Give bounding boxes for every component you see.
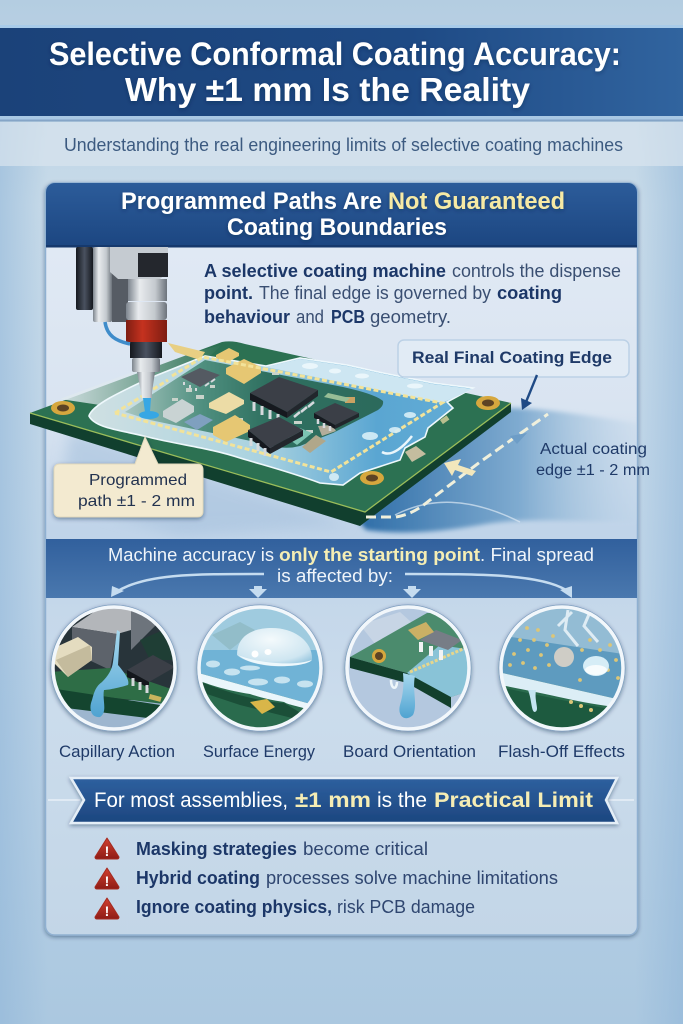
black chips <box>181 368 359 456</box>
arrow <box>526 375 537 402</box>
title text: Selective Conformal Coating Accuracy: <box>49 36 621 72</box>
programmed dashed path <box>115 357 442 472</box>
banner: practical limit: is the <box>377 789 427 812</box>
banner: practical limit: For most assemblies, <box>94 789 288 812</box>
bullet: ignore coating physics: risk PCB damage <box>337 897 475 917</box>
label: actual coating edge: edge ±1 - 2 mm <box>536 462 650 479</box>
callout: real final coating edge <box>398 340 629 410</box>
factor labels <box>59 743 625 761</box>
coating droplets <box>329 412 416 481</box>
arrows to factors <box>111 574 572 598</box>
bullet: hybrid coating <box>95 868 558 889</box>
exposed edge components <box>405 446 426 462</box>
factor: capillary action <box>50 605 180 740</box>
section band: machine accuracy: is affected by: <box>277 566 393 586</box>
section band: machine accuracy: Machine accuracy is <box>108 545 274 565</box>
label: actual coating edge: Actual coating <box>540 441 647 458</box>
intro text block: controls the dispense <box>452 261 621 281</box>
bullet: ignore coating physics <box>95 897 475 919</box>
dispense machine head <box>76 247 168 419</box>
board thickness <box>30 403 511 526</box>
dashed actual coating edge <box>366 414 548 517</box>
factor: board orientation <box>344 605 474 735</box>
bullet: ignore coating physics: Ignore coating physics, <box>136 897 332 917</box>
callout: real final coating edge: Real Final Coating Edge <box>412 348 612 367</box>
subtitle text: Understanding the real engineering limits of selective coating machines <box>64 135 623 155</box>
bullet: hybrid coating: Hybrid coating <box>136 868 260 888</box>
factor labels: Board Orientation <box>343 743 476 761</box>
bullet: masking strategies: Masking strategies <box>136 839 297 859</box>
white capacitor <box>163 399 194 423</box>
mounting holes <box>51 396 500 485</box>
title text <box>49 36 621 108</box>
intro text block: A selective coating machine <box>204 261 446 281</box>
factor: flash-off effects <box>498 605 630 740</box>
intro text block: The final edge is governed by <box>259 283 491 303</box>
factor labels: Surface Energy <box>203 743 316 761</box>
blue capacitor <box>184 414 213 430</box>
teal part <box>286 428 312 445</box>
intro text block: and <box>296 307 324 327</box>
label: actual coating edge <box>536 441 650 479</box>
coating spread pool under board <box>60 408 650 535</box>
intro text block: coating <box>497 283 562 303</box>
title text: Why ±1 mm Is the Reality <box>125 71 531 108</box>
red collar <box>126 320 167 342</box>
small components <box>172 368 355 433</box>
dispensed drop <box>139 398 159 419</box>
upper strip of coating <box>266 359 473 403</box>
gold components <box>168 343 261 442</box>
faded far corner <box>60 345 222 405</box>
arrow: cream <box>444 459 476 476</box>
bullet: hybrid coating: processes solve machine limitations <box>266 868 558 888</box>
panel heading: Not Guaranteed <box>388 188 565 215</box>
factor: surface energy <box>195 605 325 740</box>
subtitle band <box>0 122 683 166</box>
bullet: ignore coating physics: ! <box>105 903 109 919</box>
panel heading: Coating Boundaries <box>227 214 447 241</box>
banner: practical limit: ±1 mm <box>295 789 371 812</box>
bullet: masking strategies <box>95 838 428 859</box>
banner: practical limit: Practical Limit <box>434 789 593 812</box>
machine label plate <box>138 253 168 277</box>
arrow: blue <box>510 433 527 444</box>
callout: programmed path: path ±1 - 2 mm <box>78 493 195 510</box>
section band: machine accuracy <box>46 539 637 598</box>
intro text block: point. <box>204 283 253 303</box>
panel heading: Programmed Paths Are <box>121 188 382 215</box>
intro text block: PCB <box>331 307 365 327</box>
section band: machine accuracy: only the starting point <box>279 545 480 565</box>
bullet: masking strategies: become critical <box>303 839 428 859</box>
bullet: hybrid coating: ! <box>105 873 109 889</box>
intro text block <box>204 261 621 327</box>
title band <box>0 25 683 122</box>
panel heading <box>46 183 637 248</box>
blue tube <box>105 322 130 344</box>
panel: main card <box>30 183 650 935</box>
coating layer <box>89 356 473 485</box>
section band: machine accuracy: . Final spread <box>480 545 594 565</box>
PCB board <box>30 341 511 526</box>
banner: practical limit <box>48 778 634 823</box>
factor labels: Capillary Action <box>59 743 175 761</box>
intro text block: behaviour <box>204 307 290 327</box>
factor labels: Flash-Off Effects <box>498 743 625 761</box>
bullet: masking strategies: ! <box>105 843 109 859</box>
inner circuit area <box>125 360 383 448</box>
callout: programmed path <box>54 437 203 517</box>
callout: programmed path: Programmed <box>89 472 187 489</box>
intro text block: geometry. <box>370 307 451 327</box>
